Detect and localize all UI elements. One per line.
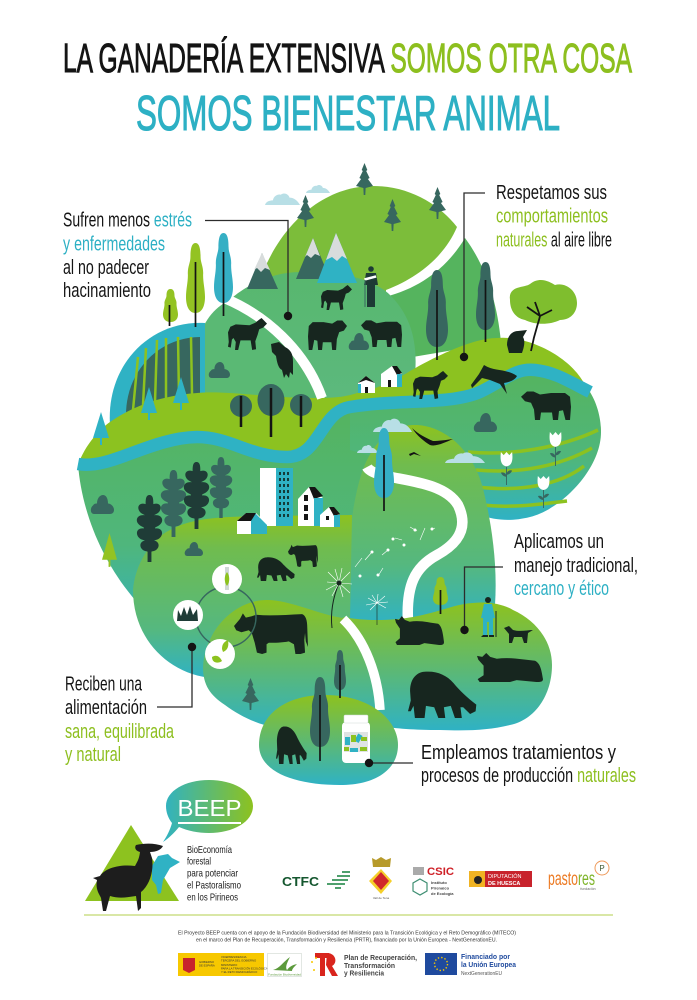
logo: coat of arms bbox=[369, 857, 392, 900]
text: alimentación: alimentación bbox=[65, 697, 147, 719]
body: lower left valley bbox=[78, 403, 380, 640]
logo: EU funding: la Unión Europea bbox=[461, 962, 516, 969]
logo: pastores bbox=[548, 861, 609, 891]
text: manejo: Aplicamos un bbox=[514, 531, 604, 553]
project tagline: para potenciar bbox=[187, 868, 238, 880]
text: estrés: al no padecer bbox=[63, 257, 149, 279]
road: lower bbox=[343, 619, 380, 710]
funding statement: en el marco del Plan de Recuperación, Transformación y Resiliencia (PRTR), financiado por la Unión Europea - NextGenerationEU. bbox=[196, 938, 497, 944]
road: upper white edge bbox=[224, 298, 322, 398]
logo: Diputación de Huesca: DE HUESCA bbox=[488, 881, 520, 887]
logo: EU funding: Financiado por bbox=[461, 954, 510, 961]
text: estrés: y enfermedades bbox=[63, 234, 165, 256]
callout: manejo bbox=[460, 531, 638, 634]
text: estrés bbox=[63, 210, 192, 302]
title bbox=[63, 35, 632, 141]
logo: EU funding: NextGenerationEU bbox=[461, 971, 502, 977]
funding statement: El Proyecto BEEP cuenta con el apoyo de la Fundación Biodiversidad del Ministerio para la Transición Ecológica y el Reto Demográfico (MITECO) bbox=[178, 930, 516, 936]
blue arc and striped forest bbox=[110, 323, 205, 440]
project tagline bbox=[187, 844, 241, 904]
text: alimentación: Reciben una bbox=[65, 674, 143, 696]
terrace stripes bbox=[468, 430, 598, 506]
connector: tratamientos bbox=[365, 759, 413, 767]
text: comportamientos: naturales al aire libre bbox=[496, 230, 612, 252]
meadow: bottom pill bbox=[259, 695, 398, 785]
callout: alimentación bbox=[65, 643, 196, 766]
triangle trees bbox=[93, 377, 189, 567]
clouds bbox=[265, 185, 485, 463]
text: alimentación: y natural bbox=[65, 744, 121, 766]
shepherd, lower, blue bbox=[481, 597, 496, 637]
village buildings bbox=[237, 468, 340, 534]
logo: pastores: P bbox=[599, 864, 605, 873]
connector: manejo bbox=[460, 567, 503, 634]
logo: Diputación de Huesca: DIPUTACIÓN bbox=[488, 873, 522, 880]
hill: teal pasture bbox=[233, 272, 416, 405]
text: manejo: cercano y ético bbox=[514, 578, 609, 600]
houses, upper bbox=[358, 366, 402, 393]
logo: coat of arms: Vall de Tena bbox=[373, 896, 389, 900]
callout: comportamientos bbox=[460, 182, 612, 361]
project tagline: en los Pirineos bbox=[187, 892, 238, 904]
logo: pastores: pastores bbox=[548, 869, 595, 890]
icon: grass bbox=[173, 600, 203, 630]
meadow: left village hill bbox=[133, 515, 352, 678]
logo: Gobierno de España: MINISTERIO bbox=[221, 963, 238, 967]
text: estrés: Sufren menos estrés bbox=[63, 210, 192, 232]
animals: sheep and goats, upper pastures bbox=[228, 285, 571, 420]
round trees bbox=[230, 384, 312, 437]
project tagline: el Pastoralismo bbox=[187, 880, 241, 892]
bushes bbox=[91, 333, 497, 556]
logo: Fundación Biodiversidad bbox=[268, 954, 302, 976]
trees: tall cypresses bbox=[163, 233, 495, 761]
connector: estrés bbox=[205, 220, 292, 320]
dog bbox=[504, 626, 533, 643]
logo: Gobierno de España bbox=[178, 953, 268, 976]
logo triangle bbox=[85, 825, 179, 901]
logo: CSIC: CSIC bbox=[427, 866, 454, 878]
callout: tratamientos bbox=[365, 742, 636, 787]
logo: Gobierno de España: GOBIERNO bbox=[199, 960, 215, 964]
text: comportamientos bbox=[496, 182, 612, 252]
tulips bbox=[501, 432, 561, 508]
pine, lower bbox=[242, 678, 259, 710]
logo: Gobierno de España: TERCERA DEL GOBIERNO bbox=[221, 958, 257, 962]
black sheep bbox=[93, 844, 163, 911]
text: tratamientos: Empleamos tratamientos y bbox=[421, 742, 616, 764]
icon: leaves bbox=[205, 639, 235, 669]
birds bbox=[409, 428, 453, 456]
shepherd, upper bbox=[364, 266, 378, 307]
connector: comportamientos bbox=[460, 193, 485, 361]
hill: top meadow bbox=[267, 186, 457, 320]
text: alimentación bbox=[65, 674, 175, 766]
landscape illustration bbox=[78, 163, 601, 785]
logo: CSIC bbox=[413, 866, 454, 896]
meadow: bottom right bbox=[343, 602, 552, 730]
text: alimentación: sana, equilibrada bbox=[65, 721, 175, 743]
jar of pills bbox=[342, 715, 370, 763]
logo: Gobierno de España: VICEPRESIDENCIA bbox=[221, 955, 247, 959]
logo: Gobierno de España: Y EL RETO DEMOGRÁFICO bbox=[221, 970, 258, 974]
BEEP wordmark: BEEP bbox=[178, 795, 242, 821]
road: winding central bbox=[367, 467, 462, 622]
connector: alimentación bbox=[157, 643, 196, 707]
logo: Plan de Recuperación: y Resiliencia bbox=[344, 970, 384, 978]
project tagline: BioEconomía bbox=[187, 844, 232, 856]
divider bbox=[84, 914, 613, 916]
logo: CSIC: Instituto bbox=[431, 880, 447, 885]
logo: Fundación Biodiversidad: Fundación Biodiversidad bbox=[268, 972, 301, 976]
dandelions bbox=[326, 527, 435, 628]
funding statement bbox=[178, 930, 516, 944]
text: tratamientos: procesos de producción naturales bbox=[421, 765, 636, 787]
logo: Plan de Recuperación: Plan de Recuperación, bbox=[344, 955, 417, 962]
logo: pastores: fundación bbox=[580, 887, 596, 891]
project tagline: forestal bbox=[187, 856, 211, 868]
BEEP logo bbox=[85, 780, 253, 911]
logo: CTFC bbox=[282, 872, 350, 889]
field: light green valley bbox=[78, 338, 601, 470]
river bbox=[78, 370, 590, 465]
meadow: cow hill bbox=[203, 600, 373, 730]
logo: CSIC: Pirenaico bbox=[431, 886, 450, 890]
animals: cows bbox=[234, 545, 543, 764]
logo: CSIC: de Ecología bbox=[431, 891, 454, 896]
logo: CTFC: CTFC bbox=[282, 874, 320, 889]
logo: Plan de Recuperación bbox=[311, 953, 417, 978]
oak row forest bbox=[137, 457, 232, 562]
icon: wheat bbox=[212, 564, 242, 594]
text: estrés: hacinamiento bbox=[63, 280, 151, 302]
logo: EU funding bbox=[425, 953, 516, 977]
speech bubble bbox=[163, 780, 253, 842]
logo: Plan de Recuperación: Transformación bbox=[344, 963, 395, 970]
logo: Gobierno de España: PARA LA TRANSICIÓN ECOLÓGICA bbox=[221, 966, 268, 970]
logo: Diputación de Huesca bbox=[469, 871, 532, 887]
callout: estrés bbox=[63, 210, 292, 320]
text: tratamientos bbox=[421, 742, 636, 787]
text: manejo: manejo tradicional, bbox=[514, 555, 638, 577]
hill: left pasture bbox=[197, 302, 318, 400]
body: terraced fields bbox=[350, 370, 601, 520]
hill: central road hill bbox=[347, 425, 496, 625]
text: comportamientos: comportamientos bbox=[496, 206, 608, 228]
feed cycle icons bbox=[173, 564, 256, 669]
text: comportamientos: Respetamos sus bbox=[496, 182, 607, 204]
pine trees, top hill bbox=[297, 163, 446, 231]
teal sheep bbox=[152, 854, 180, 894]
mountains bbox=[247, 233, 357, 289]
hill: right dark green bbox=[385, 238, 501, 360]
logo: Gobierno de España: DE ESPAÑA bbox=[199, 962, 215, 968]
text: manejo bbox=[514, 531, 638, 600]
tree: branching on right hill bbox=[510, 280, 577, 351]
